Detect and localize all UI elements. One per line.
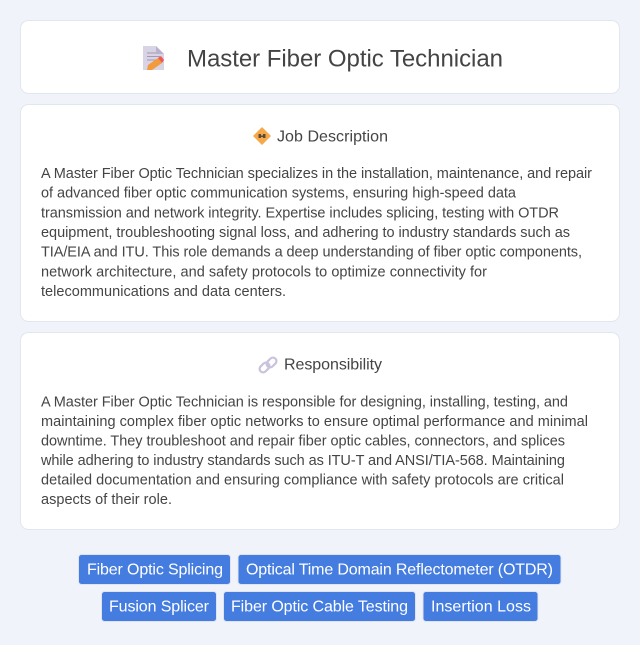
text: job description paragraph: equipment, troubleshooting signal loss, and adhering to industry standards such as bbox=[41, 225, 570, 241]
text: job description paragraph: of advanced fiber optic communication systems, ensuring high-speed data bbox=[41, 186, 517, 202]
panel: job description bbox=[20, 104, 620, 322]
panel: responsibility bbox=[20, 332, 620, 530]
heading: responsibility: Responsibility bbox=[284, 356, 382, 374]
tag: fiber optic splicing bbox=[78, 554, 230, 584]
tag: OTDR bbox=[238, 554, 561, 584]
text: responsibility paragraph: maintaining complex fiber optic networks to ensure optimal performance and minimal bbox=[41, 414, 588, 430]
tag: fiber optic cable testing: Fiber Optic Cable Testing bbox=[231, 598, 408, 616]
text: job description paragraph: TIA/EIA and ITU. This role demands a deep understanding of fiber optic components, bbox=[41, 244, 582, 260]
icon: document with pencil bbox=[143, 46, 164, 70]
tag: OTDR: Optical Time Domain Reflectometer (OTDR) bbox=[246, 562, 553, 578]
heading: job description: Job Description bbox=[277, 128, 388, 146]
text: responsibility paragraph: detailed documentation and ensuring compliance with safety protocols are critical bbox=[41, 472, 564, 488]
tag: fiber optic splicing: Fiber Optic Splicing bbox=[87, 562, 223, 578]
text: responsibility paragraph: downtime. They troubleshoot and repair fiber optic cables, connectors, and splices bbox=[41, 434, 565, 450]
title: Master Fiber Optic Technician bbox=[187, 46, 503, 72]
text: responsibility paragraph bbox=[40, 394, 588, 508]
tag: fusion splicer: Fusion Splicer bbox=[109, 598, 210, 616]
text: job description paragraph: A Master Fiber Optic Technician specializes in the installation, maintenance, and repair bbox=[41, 166, 592, 182]
text: job description paragraph: telecommunications and data centers. bbox=[41, 284, 286, 300]
text: responsibility paragraph: while adhering to industry standards such as ITU-T and ANSI/TIA-568. Maintaining bbox=[40, 453, 565, 469]
icon: link bbox=[258, 356, 278, 374]
text: responsibility paragraph: A Master Fiber Optic Technician is responsible for designing, installing, testing, and bbox=[41, 394, 568, 410]
icon: diamond sign bbox=[254, 128, 270, 144]
tag: insertion loss: Insertion Loss bbox=[431, 598, 531, 616]
text: job description paragraph: transmission and network integrity. Expertise includes splicing, testing with OTDR bbox=[41, 206, 559, 222]
tags bbox=[78, 554, 561, 622]
text: responsibility paragraph: aspects of their role. bbox=[41, 492, 172, 508]
tag: fiber optic cable testing bbox=[224, 592, 416, 622]
tag: insertion loss bbox=[423, 592, 538, 622]
text: job description paragraph bbox=[41, 166, 592, 300]
text: job description paragraph: network architecture, and safety protocols to optimize connectivity for bbox=[41, 264, 487, 280]
panel: title card bbox=[20, 20, 620, 94]
tag: fusion splicer bbox=[102, 592, 216, 622]
